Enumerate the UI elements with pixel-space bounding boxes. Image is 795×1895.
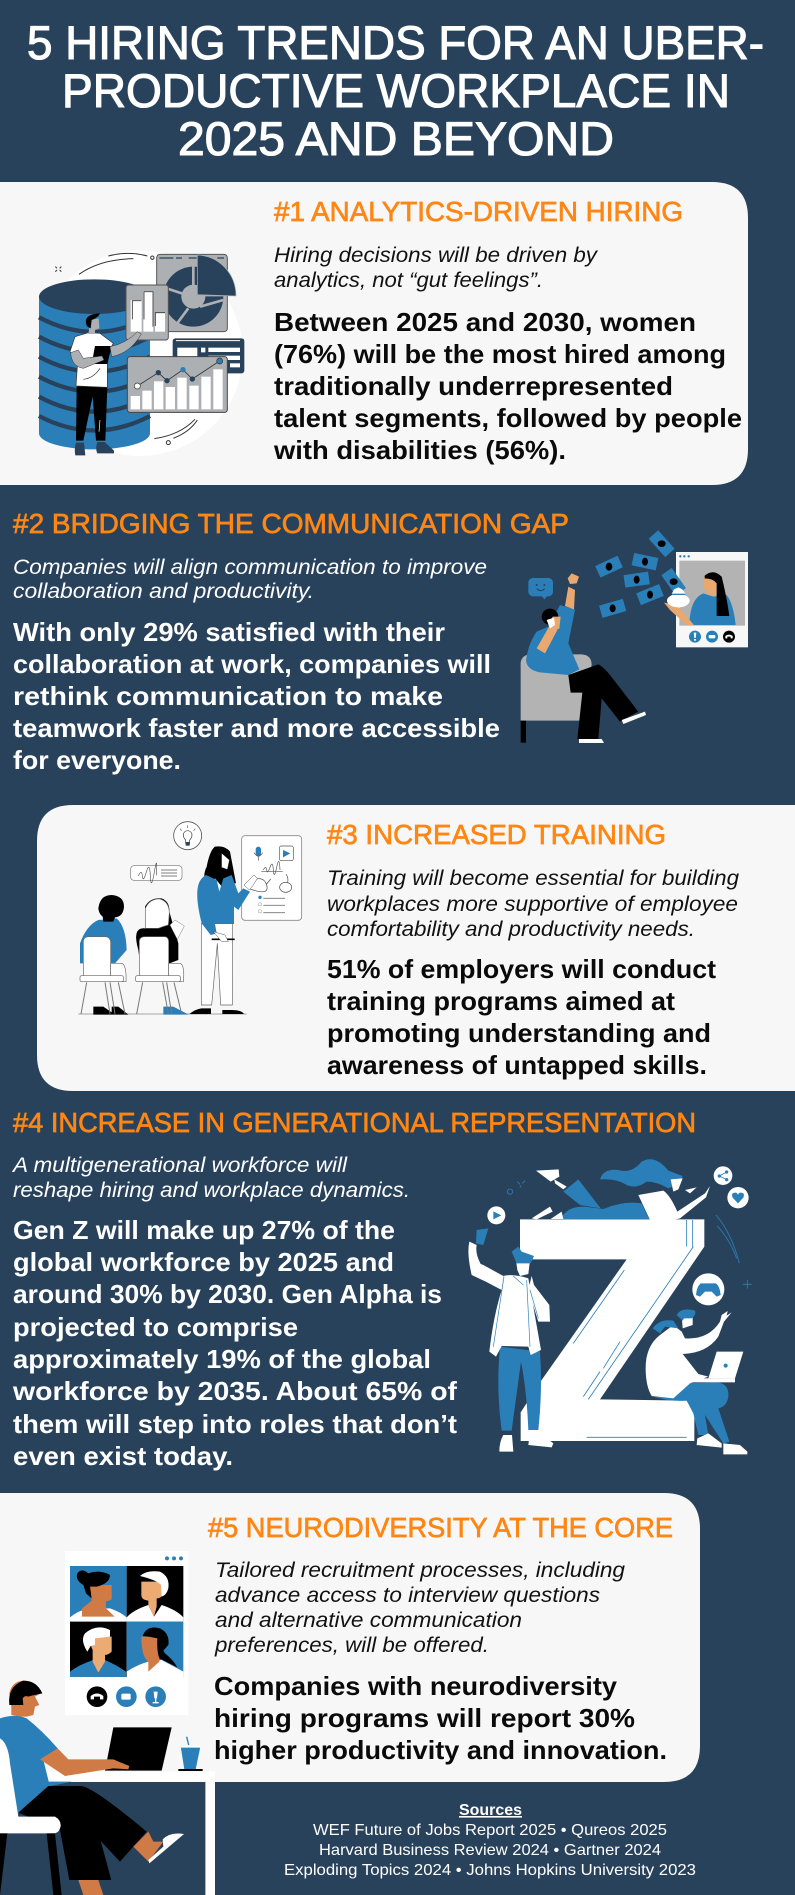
text: trend 2 summary: Companies will align communication to improve <box>13 555 487 579</box>
text: trend 4 statistic <box>12 1215 457 1471</box>
text: trend 4 statistic: workforce by 2035. About 65% of <box>12 1376 457 1406</box>
text: trend 2 statistic: rethink communication to make <box>13 681 443 711</box>
text: trend 4 statistic: projected to comprise <box>13 1312 298 1342</box>
text: trend 4 summary <box>11 1153 410 1202</box>
text: trend 4 statistic: global workforce by 2025 and <box>13 1247 394 1277</box>
text: trend 1 statistic: Between 2025 and 2030, women <box>274 307 696 337</box>
illustration: data analyst with database and charts <box>37 251 244 456</box>
panel: trend 1 analytics-driven hiring <box>0 182 748 485</box>
text: trend 1 statistic: talent segments, followed by people <box>274 403 742 433</box>
text: trend 4 statistic: approximately 19% of the global <box>13 1344 431 1374</box>
text: trend 5 summary <box>214 1558 625 1657</box>
sources: Sources <box>459 1802 522 1819</box>
sources: WEF Future of Jobs Report 2025 • Qureos 2025 <box>313 1822 667 1839</box>
text: trend 5 summary: advance access to interview questions <box>215 1583 600 1607</box>
title: PRODUCTIVE WORKPLACE IN <box>62 64 730 117</box>
text: trend 5 statistic: higher productivity and innovation. <box>214 1735 667 1765</box>
heading: trend 5: #5 NEURODIVERSITY AT THE CORE <box>208 1512 673 1543</box>
title <box>27 16 764 165</box>
illustration: man on video call with money <box>521 530 748 743</box>
sources <box>284 1802 696 1879</box>
heading: trend 1: #1 ANALYTICS-DRIVEN HIRING <box>274 196 683 227</box>
text: trend 2 statistic: for everyone. <box>13 745 181 775</box>
heading: trend 2: #2 BRIDGING THE COMMUNICATION GAP <box>13 508 569 539</box>
panel: trend 4 generational representation <box>11 1107 752 1471</box>
sources: Exploding Topics 2024 • Johns Hopkins University 2023 <box>284 1862 696 1879</box>
text: trend 5 statistic: Companies with neurodiversity <box>214 1671 618 1701</box>
illustration: gen Z people around a large letter Z <box>468 1159 752 1454</box>
text: trend 1 statistic: traditionally underrepresented <box>274 371 673 401</box>
title: 5 HIRING TRENDS FOR AN UBER- <box>27 16 764 69</box>
text: trend 2 summary: collaboration and productivity. <box>13 579 314 603</box>
text: trend 1 statistic <box>273 307 742 465</box>
text: trend 5 summary: Tailored recruitment processes, including <box>215 1558 625 1582</box>
text: trend 4 statistic: them will step into roles that don’t <box>13 1409 457 1439</box>
text: trend 5 statistic: hiring programs will report 30% <box>214 1703 635 1733</box>
text: trend 3 summary <box>327 866 739 941</box>
text: trend 3 statistic: training programs aimed at <box>327 986 675 1016</box>
text: trend 1 statistic: with disabilities (56%). <box>273 435 566 465</box>
text: trend 1 summary: Hiring decisions will be driven by <box>274 243 598 267</box>
text: trend 2 summary <box>13 555 487 603</box>
text: trend 5 summary: and alternative communication <box>215 1608 522 1632</box>
panel: trend 3 increased training <box>37 805 795 1091</box>
text: trend 3 statistic: 51% of employers will conduct <box>327 954 716 984</box>
text: trend 2 statistic: With only 29% satisfied with their <box>13 617 445 647</box>
text: trend 4 statistic: Gen Z will make up 27% of the <box>13 1215 395 1245</box>
illustration: presenter training seated employees <box>78 822 302 1015</box>
panel: trend 2 bridging the communication gap <box>13 508 748 775</box>
text: trend 5 summary: preferences, will be offered. <box>214 1633 489 1657</box>
text: trend 4 summary: A multigenerational workforce will <box>11 1153 348 1177</box>
text: trend 3 summary: comfortability and productivity needs. <box>327 917 695 941</box>
text: trend 3 summary: Training will become essential for building <box>327 866 739 890</box>
title: 2025 AND BEYOND <box>178 112 614 165</box>
text: trend 3 summary: workplaces more supportive of employee <box>327 892 738 916</box>
heading: trend 3: #3 INCREASED TRAINING <box>327 819 666 850</box>
illustration: remote worker on video meeting <box>0 1551 215 1895</box>
heading: trend 4: #4 INCREASE IN GENERATIONAL REPRESENTATION <box>13 1107 696 1138</box>
text: trend 3 statistic: awareness of untapped skills. <box>327 1050 707 1080</box>
text: trend 2 statistic: collaboration at work, companies will <box>13 649 491 679</box>
text: trend 4 summary: reshape hiring and workplace dynamics. <box>13 1178 410 1202</box>
text: trend 3 statistic: promoting understanding and <box>327 1018 711 1048</box>
sources: Harvard Business Review 2024 • Gartner 2024 <box>319 1842 661 1859</box>
text: trend 4 statistic: around 30% by 2030. Gen Alpha is <box>13 1279 442 1309</box>
text: trend 1 summary: analytics, not “gut feelings”. <box>274 268 543 292</box>
text: trend 1 summary <box>274 243 598 292</box>
text: trend 3 statistic <box>327 954 716 1080</box>
text: trend 4 statistic: even exist today. <box>13 1441 233 1471</box>
panel: trend 5 neurodiversity at the core <box>0 1493 700 1895</box>
text: trend 1 statistic: (76%) will be the most hired among <box>274 339 726 369</box>
text: trend 2 statistic: teamwork faster and more accessible <box>13 713 500 743</box>
text: trend 5 statistic <box>214 1671 667 1765</box>
text: trend 2 statistic <box>13 617 500 775</box>
